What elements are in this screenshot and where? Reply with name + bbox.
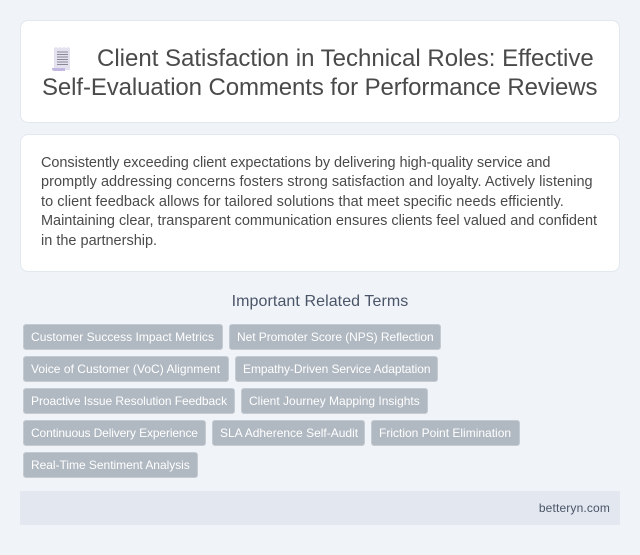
tag: SLA Adherence Self-Audit [220, 426, 358, 440]
panel: title card [20, 20, 620, 123]
tag [23, 388, 235, 414]
tag [229, 324, 441, 350]
footer bar [20, 491, 620, 525]
title: Self-Evaluation Comments for Performance Reviews [42, 74, 597, 101]
title [42, 45, 597, 101]
tag: Continuous Delivery Experience [31, 426, 198, 440]
tag: Voice of Customer (VoC) Alignment [31, 362, 220, 376]
summary text: promptly addressing concerns fosters strong satisfaction and loyalty. Actively listening [41, 174, 593, 190]
section heading: Important Related Terms [232, 293, 408, 310]
tag [212, 420, 365, 446]
summary text: in the partnership. [41, 233, 157, 249]
tag [23, 420, 206, 446]
tag: Net Promoter Score (NPS) Reflection [237, 330, 434, 344]
tag: Empathy-Driven Service Adaptation [243, 362, 430, 376]
title: Client Satisfaction in Technical Roles: Effective [97, 45, 594, 72]
footer site name: betteryn.com [539, 501, 610, 515]
tag [371, 420, 520, 446]
icon: document scroll [52, 47, 70, 71]
tag: Client Journey Mapping Insights [249, 394, 420, 408]
tag: Real-Time Sentiment Analysis [31, 458, 190, 472]
tag [235, 356, 438, 382]
summary text: to client feedback allows for tailored solutions that meet specific needs efficiently. [41, 194, 564, 210]
summary text: Consistently exceeding client expectations by delivering high-quality service and [41, 155, 550, 171]
tag: Proactive Issue Resolution Feedback [31, 394, 227, 408]
tag [23, 356, 229, 382]
summary text [41, 155, 597, 249]
summary text: Maintaining clear, transparent communication ensures clients feel valued and confident [41, 213, 597, 229]
panel: summary card [20, 134, 620, 272]
tag [241, 388, 428, 414]
tag [23, 324, 223, 350]
tag [23, 452, 198, 478]
tag: Customer Success Impact Metrics [31, 330, 214, 344]
tag: Friction Point Elimination [379, 426, 511, 440]
